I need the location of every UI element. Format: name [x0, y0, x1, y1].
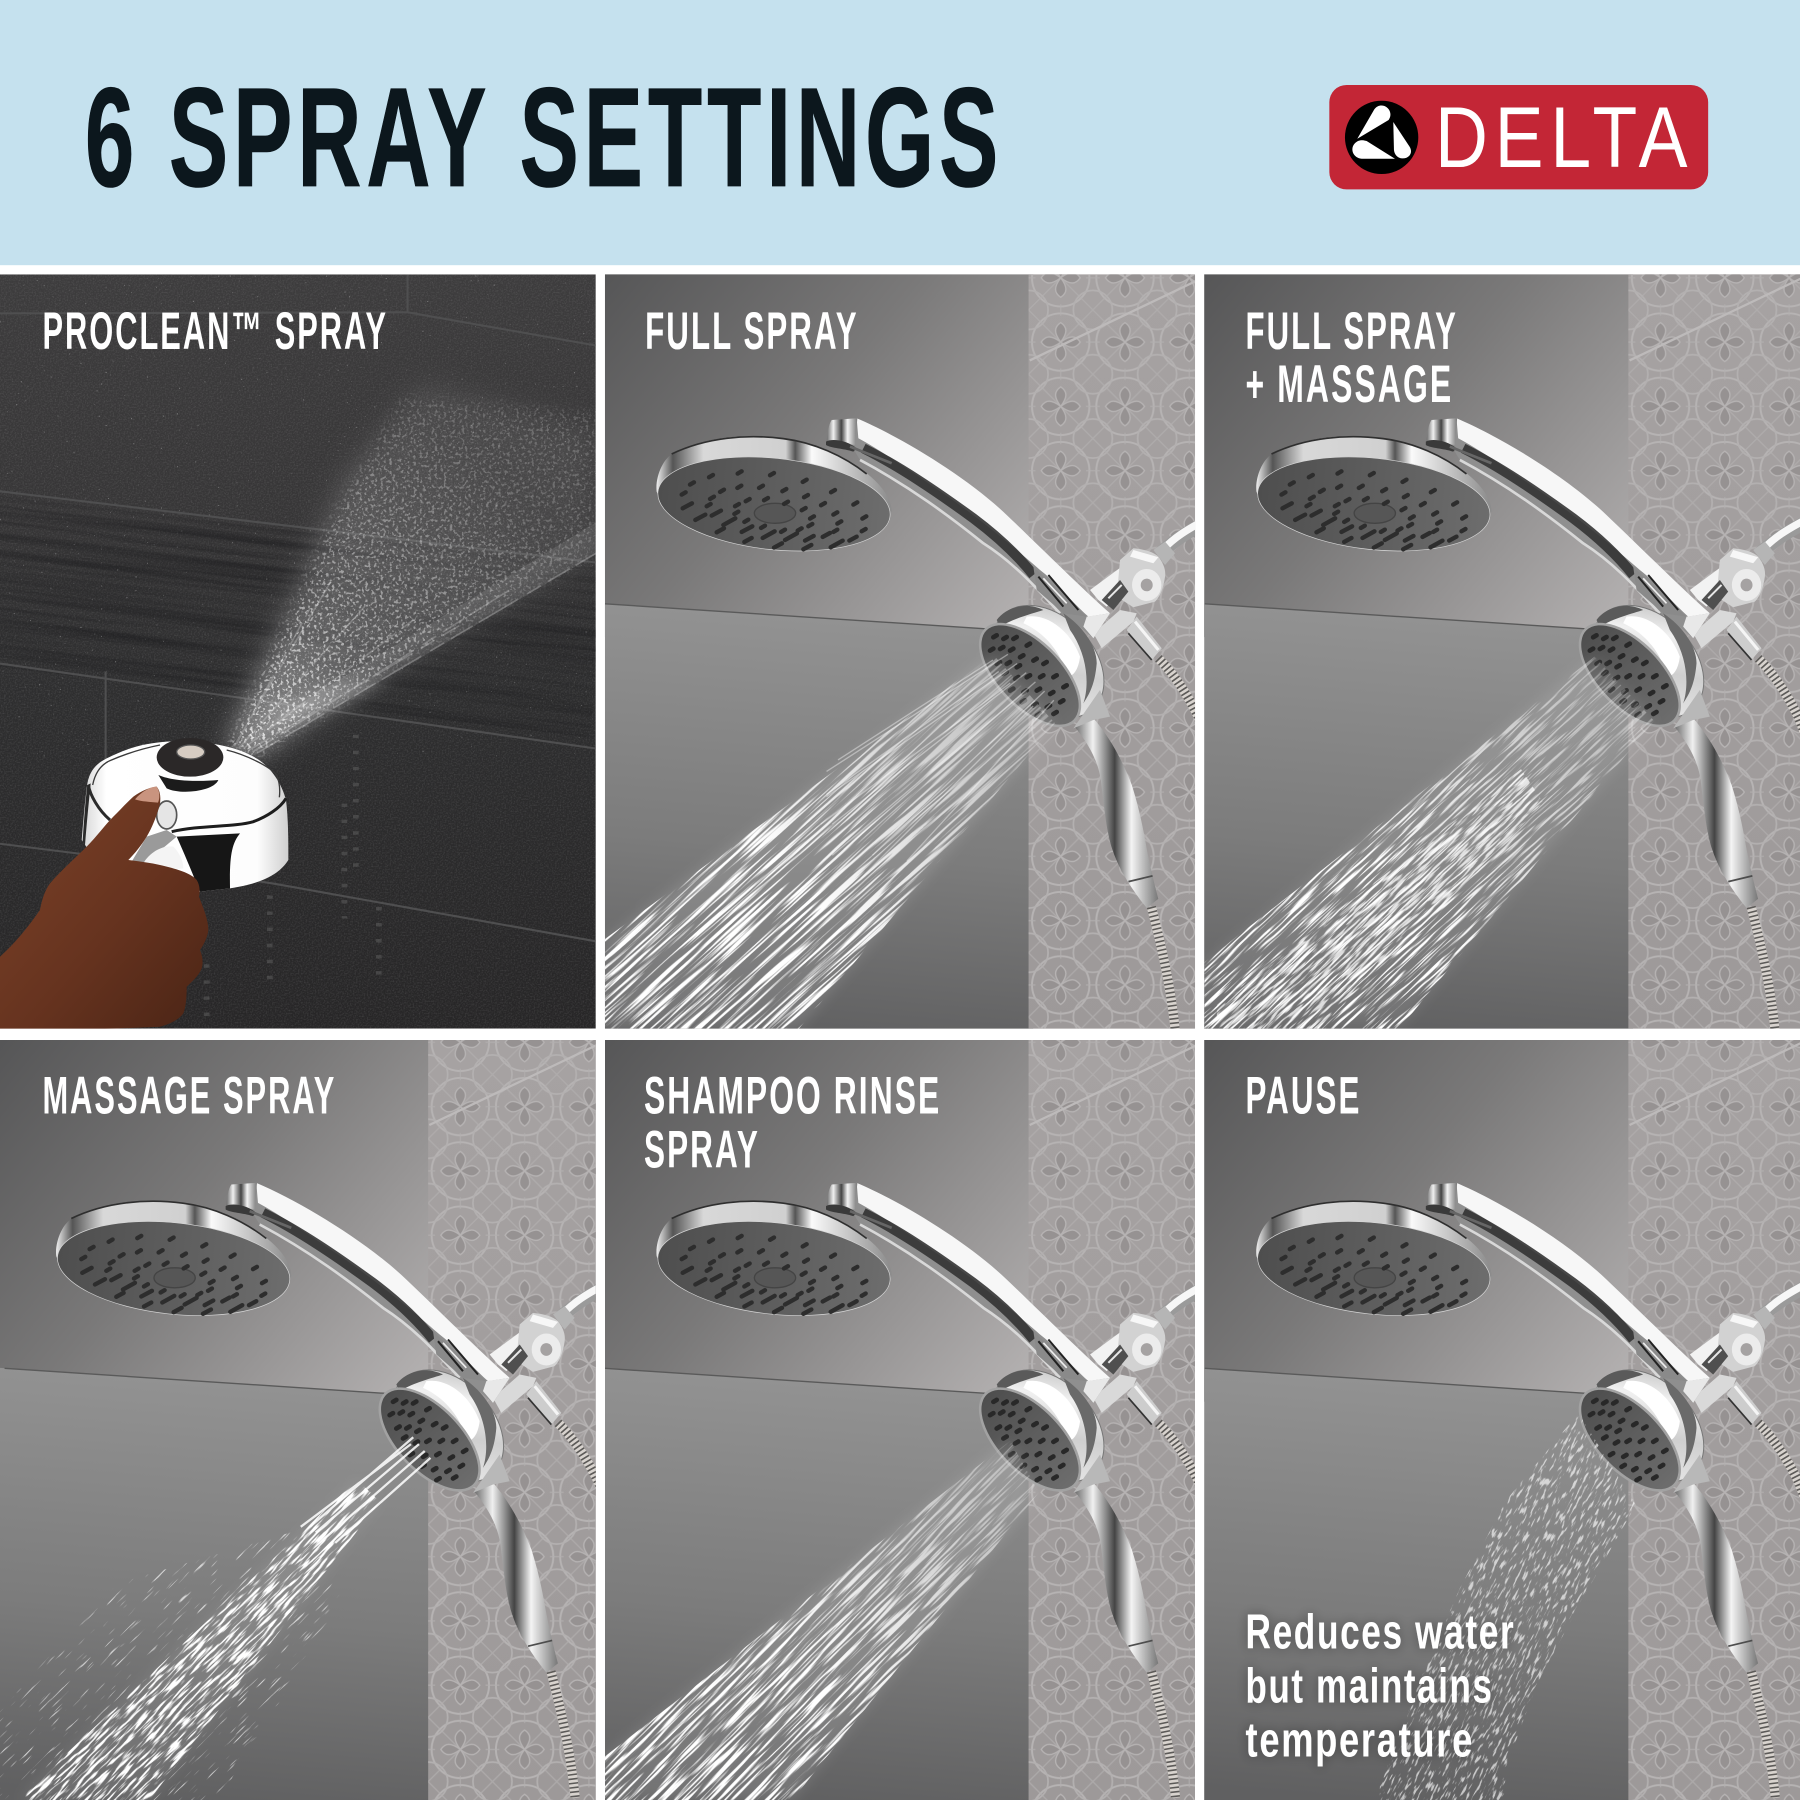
header band — [0, 0, 1800, 265]
icon: hand pressing button — [0, 787, 208, 1030]
water jet — [227, 382, 596, 755]
label line two: SPRAY — [644, 1120, 760, 1179]
water spray — [605, 654, 1055, 1029]
water trickle — [1380, 1413, 1636, 1800]
title: 6 SPRAY SETTINGS — [85, 58, 1003, 216]
panel: shampoo rinse spray — [591, 1034, 1220, 1800]
note text: Reduces water — [1246, 1604, 1515, 1659]
water spray — [605, 1441, 1039, 1800]
label: FULL SPRAY — [645, 302, 859, 361]
water spray — [0, 1437, 430, 1800]
wordmark: DELTA — [1435, 90, 1694, 186]
note text — [1246, 1604, 1515, 1767]
label: MASSAGE SPRAY — [42, 1067, 336, 1126]
note text: temperature — [1246, 1712, 1474, 1767]
label line two: + MASSAGE — [1246, 355, 1453, 414]
label: PROCLEAN™ SPRAY — [42, 302, 388, 361]
panel: massage spray — [0, 1034, 620, 1800]
panel: ProClean spray — [0, 274, 609, 1030]
icon: Delta triangle mark — [1345, 101, 1418, 174]
label: PAUSE — [1246, 1067, 1361, 1126]
panel: full spray — [591, 270, 1220, 1035]
icon: hand shower body — [82, 738, 288, 892]
Delta logo — [1329, 85, 1708, 189]
label: FULL SPRAY — [1246, 302, 1458, 361]
panel: full spray + massage — [1191, 270, 1800, 1035]
panel: pause — [1191, 1034, 1800, 1800]
label: SHAMPOO RINSE — [644, 1067, 941, 1126]
water spray — [1204, 657, 1654, 1029]
note text: but maintains — [1246, 1658, 1493, 1713]
